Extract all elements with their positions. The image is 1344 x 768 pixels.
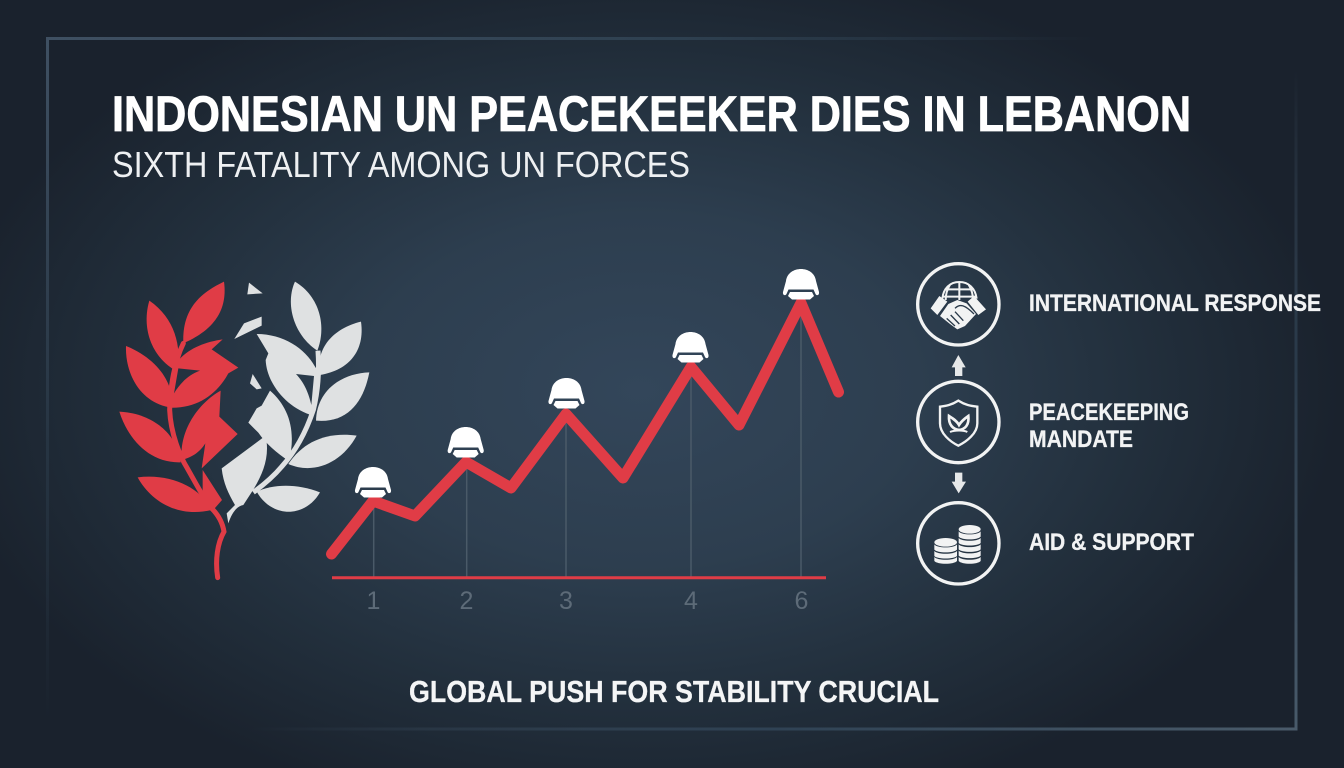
axis numbers: 3: [559, 587, 573, 615]
label: peacekeeping mandate: PEACEKEEPING: [1029, 399, 1189, 426]
axis numbers: [367, 587, 808, 615]
axis numbers: 2: [460, 587, 473, 615]
closing statement: GLOBAL PUSH FOR STABILITY CRUCIAL: [409, 674, 939, 709]
arrow down: [952, 473, 966, 493]
title: INDONESIAN UN PEACEKEEKER DIES IN LEBANON: [112, 86, 1191, 142]
icon: shield: [918, 381, 999, 463]
arrow up: [952, 355, 966, 376]
white half of branch: [222, 282, 369, 523]
icon: broken olive branch: [119, 282, 369, 578]
label: peacekeeping mandate: [1029, 399, 1189, 453]
axis numbers: 1: [367, 587, 380, 615]
label: peacekeeping mandate: MANDATE: [1029, 426, 1133, 453]
subtitle: SIXTH FATALITY AMONG UN FORCES: [112, 144, 690, 185]
line chart: fatalities rising: [332, 269, 838, 615]
chart red trend line: [332, 303, 838, 554]
axis numbers: 4: [684, 587, 698, 615]
axis numbers: 6: [795, 587, 808, 615]
icon: coin stacks: [918, 503, 999, 584]
icon: globe and handshake: [918, 264, 999, 345]
chart drop lines: [374, 308, 801, 577]
red half of branch: [119, 282, 238, 578]
helmet markers: [355, 269, 819, 498]
label: aid and support: AID & SUPPORT: [1029, 529, 1194, 556]
chart axis: [332, 576, 826, 579]
icon column: [918, 264, 999, 584]
